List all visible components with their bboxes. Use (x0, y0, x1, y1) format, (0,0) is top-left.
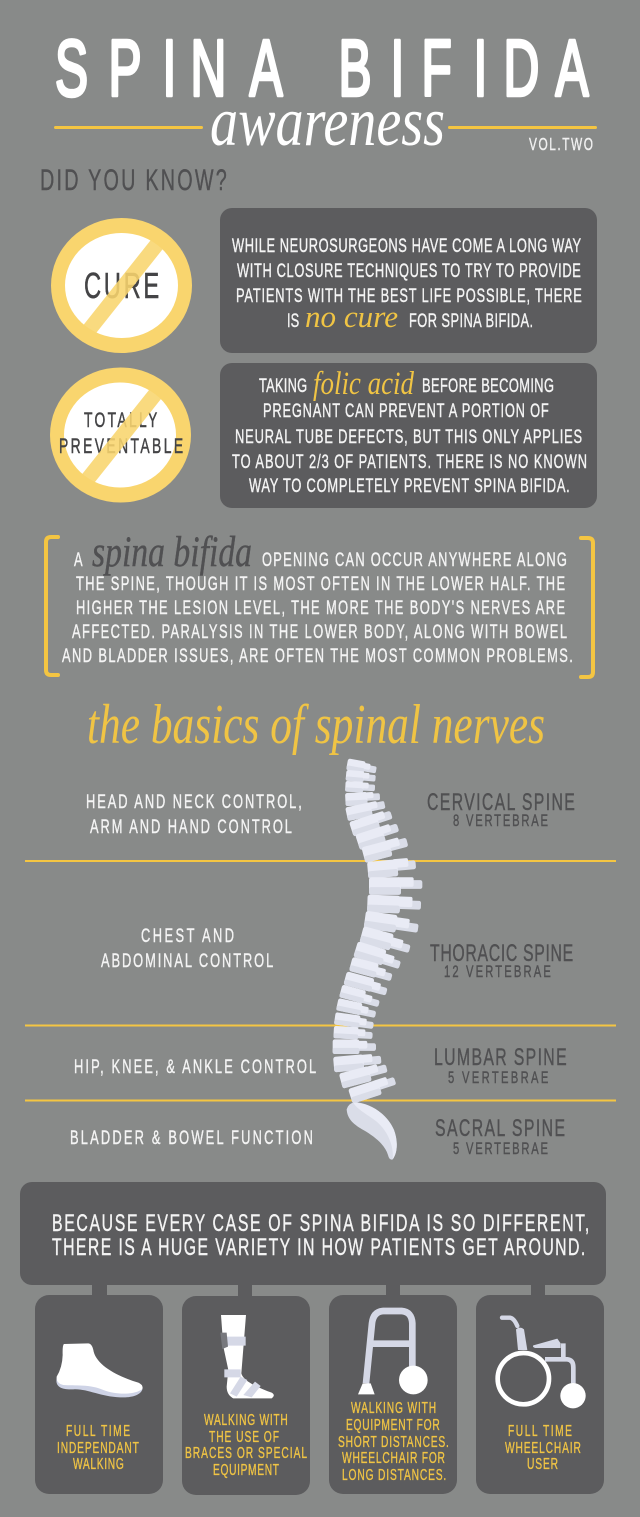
panel: no cure: no cure (305, 299, 398, 334)
card: independent walking: INDEPENDANT (57, 1439, 139, 1457)
icon: no cure sign: CURE (84, 266, 159, 306)
volume label: VOL.TWO (529, 135, 593, 155)
panel: folic acid (220, 363, 597, 508)
card: full-time wheelchair: FULL TIME (508, 1422, 572, 1440)
callout: where the opening occurs (46, 529, 593, 677)
callout: where the opening occurs: HIGHER THE LESION LEVEL, THE MORE THE BODY'S NERVES ARE (76, 596, 565, 619)
row: cervical: HEAD AND NECK CONTROL, (86, 790, 302, 813)
card: walking with braces: WALKING WITH (204, 1411, 288, 1429)
row: cervical: ARM AND HAND CONTROL (90, 815, 292, 838)
panel: no cure: IS (287, 309, 299, 332)
row: sacral: BLADDER & BOWEL FUNCTION (70, 1126, 313, 1149)
row: cervical: 8 VERTEBRAE (453, 812, 548, 831)
row: sacral: 5 VERTEBRAE (453, 1140, 548, 1159)
panel: no cure: WITH CLOSURE TECHNIQUES TO TRY TO PROVIDE (237, 259, 581, 282)
row: lumbar: 5 VERTEBRAE (448, 1069, 548, 1088)
panel: folic acid: PREGNANT CAN PREVENT A PORTION OF (263, 399, 549, 422)
callout: where the opening occurs: OPENING CAN OCCUR ANYWHERE ALONG (262, 548, 567, 571)
icon: spine (333, 758, 422, 1160)
icon: not totally preventable sign (50, 368, 191, 502)
row: thoracic: ABDOMINAL CONTROL (101, 949, 273, 972)
row: thoracic: 12 VERTEBRAE (444, 963, 551, 982)
callout: where the opening occurs: AFFECTED. PARALYSIS IN THE LOWER BODY, ALONG WITH BOWEL (72, 620, 567, 643)
card: independent walking: FULL TIME (66, 1422, 130, 1440)
panel: variety of mobility: BECAUSE EVERY CASE OF SPINA BIFIDA IS SO DIFFERENT, (52, 1211, 589, 1237)
title: Spina Bifida: SPINA BIFIDA (55, 25, 589, 114)
card: walking with braces: EQUIPMENT (213, 1461, 279, 1479)
row: cervical (86, 790, 575, 838)
icon: foot (56, 1343, 143, 1397)
icon: not totally preventable sign: TOTALLY (84, 408, 157, 432)
panel: variety of mobility (20, 1182, 606, 1285)
callout: where the opening occurs: THE SPINE, THOUGH IT IS MOST OFTEN IN THE LOWER HALF. THE (76, 572, 565, 595)
panel: no cure: FOR SPINA BIFIDA. (409, 309, 533, 332)
panel: no cure: WHILE NEUROSURGEONS HAVE COME A LONG WAY (232, 234, 581, 257)
row: lumbar (74, 1045, 567, 1088)
card: full-time wheelchair: WHEELCHAIR (505, 1439, 581, 1457)
row: sacral (70, 1116, 565, 1159)
panel: folic acid: folic acid (313, 366, 414, 402)
icon: leg brace (220, 1315, 274, 1398)
panel: no cure (220, 208, 597, 353)
row: thoracic (101, 924, 573, 982)
card: independent walking (35, 1295, 163, 1494)
callout: where the opening occurs: A (74, 548, 83, 571)
card: walker and wheelchair: LONG DISTANCES. (342, 1466, 446, 1484)
card: walker and wheelchair: SHORT DISTANCES. (338, 1433, 449, 1451)
card: full-time wheelchair (476, 1295, 604, 1494)
panel: folic acid: TO ABOUT 2/3 OF PATIENTS. THERE IS NO KNOWN (232, 450, 587, 473)
panel: folic acid: TAKING (259, 374, 307, 397)
icon: no cure sign (51, 218, 192, 353)
row: thoracic: CHEST AND (141, 924, 234, 947)
card: walker and wheelchair: WALKING WITH (351, 1399, 436, 1417)
callout: where the opening occurs: spina bifida (92, 529, 252, 576)
card: walker and wheelchair: WHEELCHAIR FOR (342, 1449, 445, 1467)
panel: no cure: PATIENTS WITH THE BEST LIFE POSSIBLE, THERE (236, 284, 582, 307)
icon: not totally preventable sign: PREVENTABLE (59, 434, 183, 458)
panel: folic acid: NEURAL TUBE DEFECTS, BUT THIS ONLY APPLIES (235, 425, 582, 448)
subtitle: awareness: awareness (210, 84, 445, 161)
panel: folic acid: WAY TO COMPLETELY PREVENT SPINA BIFIDA. (249, 474, 570, 497)
row: lumbar: LUMBAR SPINE (434, 1045, 567, 1071)
callout: where the opening occurs: AND BLADDER ISSUES, ARE OFTEN THE MOST COMMON PROBLEMS. (62, 644, 573, 667)
card: full-time wheelchair: USER (527, 1455, 558, 1473)
card: walking with braces: BRACES OR SPECIAL (185, 1444, 307, 1462)
row: thoracic: THORACIC SPINE (430, 941, 573, 967)
subtitle: awareness (54, 84, 597, 161)
icon: walker (358, 1311, 428, 1394)
row: sacral: SACRAL SPINE (435, 1116, 565, 1142)
icon: wheelchair (498, 1318, 586, 1408)
card: walking with braces (182, 1296, 310, 1495)
card: walker and wheelchair: EQUIPMENT FOR (346, 1416, 440, 1434)
card: walker and wheelchair (329, 1295, 457, 1494)
panel: folic acid: BEFORE BECOMING (422, 374, 554, 397)
panel: variety of mobility: THERE IS A HUGE VARIETY IN HOW PATIENTS GET AROUND. (52, 1235, 585, 1261)
card: independent walking: WALKING (73, 1455, 124, 1473)
heading: did you know: DID YOU KNOW? (40, 164, 227, 197)
row: cervical: CERVICAL SPINE (427, 790, 575, 816)
card: walking with braces: THE USE OF (209, 1428, 279, 1446)
row: lumbar: HIP, KNEE, & ANKLE CONTROL (74, 1055, 316, 1078)
